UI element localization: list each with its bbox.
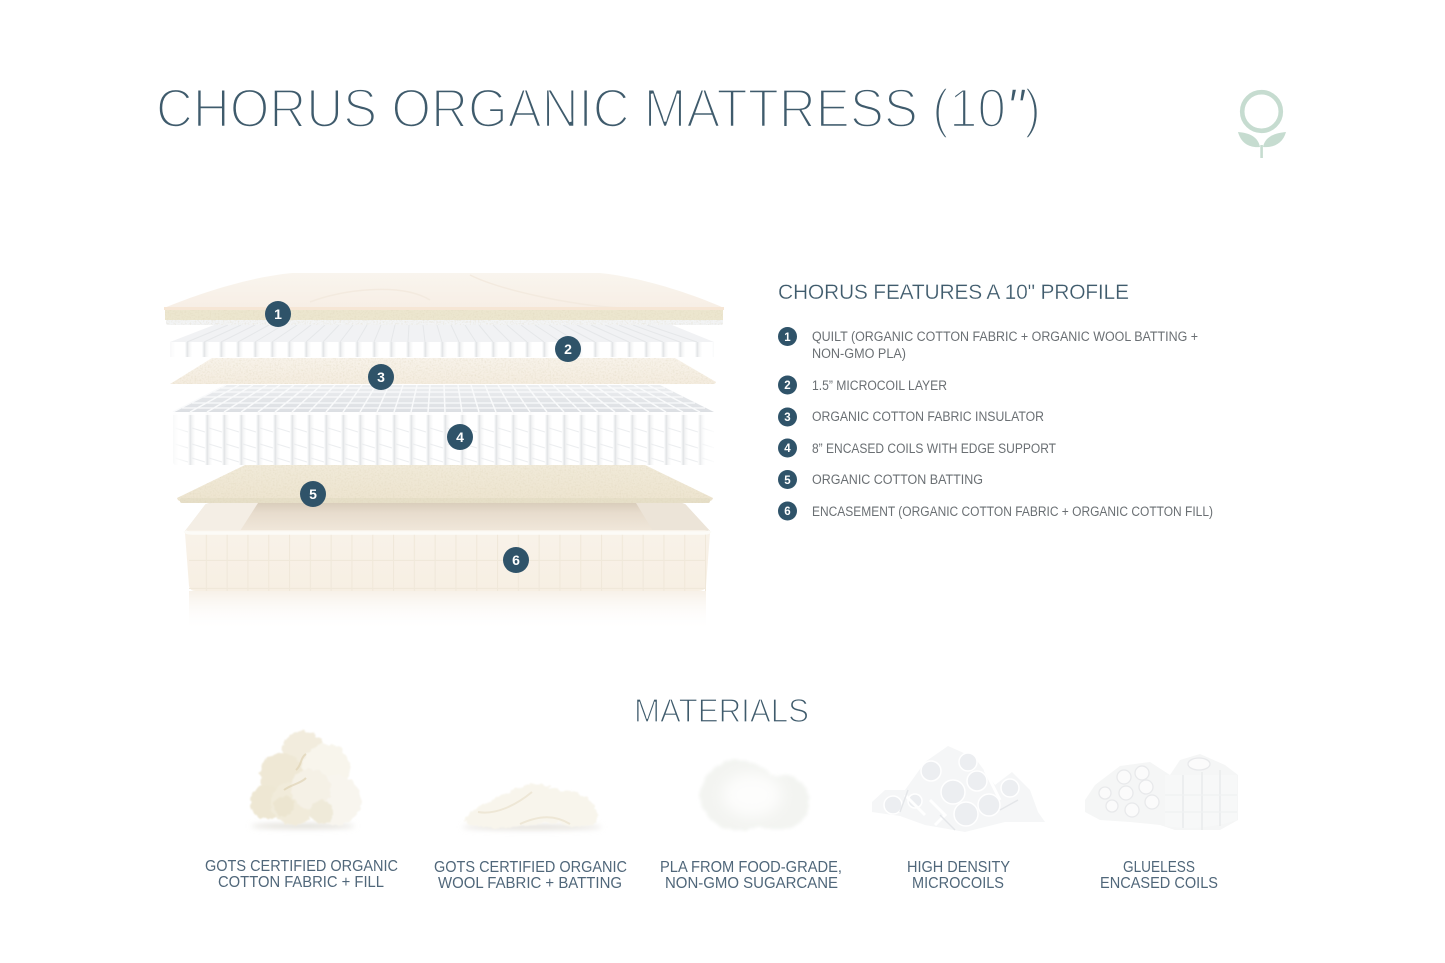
materials heading: MATERIALS: [634, 692, 809, 729]
item 4: 8” ENCASED COILS WITH EDGE SUPPORT: [812, 441, 1056, 456]
item 1: [778, 327, 1198, 361]
material: encased coils: [1085, 754, 1238, 892]
item 4: 4: [784, 443, 791, 455]
caption: [434, 859, 627, 892]
item 5: ORGANIC COTTON BATTING: [812, 472, 983, 487]
icon: wool batting: [462, 784, 602, 830]
caption: [660, 859, 842, 892]
layer 4: encased coils: [173, 385, 714, 465]
item 5: [778, 470, 983, 489]
item 1: QUILT (ORGANIC COTTON FABRIC + ORGANIC WOOL BATTING +: [812, 329, 1198, 344]
badge 5: [300, 481, 326, 507]
icon: encased coil bundle: [1085, 754, 1238, 830]
layer 3: organic cotton insulator: [170, 358, 716, 384]
material: organic cotton: [205, 731, 398, 891]
caption: GLUELESS: [1123, 859, 1195, 876]
item 6: [778, 502, 1213, 520]
material: microcoils: [872, 746, 1045, 892]
icon: cotton tuft: [250, 731, 361, 828]
item 6: 6: [784, 506, 791, 518]
layer 2: microcoil layer: [170, 325, 714, 357]
item 1: 1: [784, 332, 791, 344]
caption: [205, 858, 398, 891]
badge 1: [265, 301, 291, 327]
item 3: ORGANIC COTTON FABRIC INSULATOR: [812, 409, 1044, 424]
caption: COTTON FABRIC + FILL: [218, 874, 384, 891]
badge 3: 3: [377, 369, 385, 385]
item 6: ENCASEMENT (ORGANIC COTTON FABRIC + ORGANIC COTTON FILL): [812, 504, 1213, 519]
caption: GOTS CERTIFIED ORGANIC: [205, 858, 398, 875]
item 3: 3: [784, 412, 791, 424]
item 1: NON-GMO PLA): [812, 346, 906, 361]
title: CHORUS ORGANIC MATTRESS (10"): [156, 77, 1041, 139]
caption: [1100, 859, 1218, 892]
badge 1: 1: [274, 306, 282, 322]
badge 4: [447, 424, 473, 450]
item 2: 1.5” MICROCOIL LAYER: [812, 378, 947, 393]
layered mattress diagram: [164, 273, 724, 631]
badge 2: [555, 336, 581, 362]
icon: sprout logo: [1238, 92, 1286, 158]
item 2: 2: [784, 380, 791, 392]
features list: [778, 327, 1213, 520]
caption: WOOL FABRIC + BATTING: [438, 875, 622, 892]
badge 2: 2: [564, 341, 572, 357]
caption: GOTS CERTIFIED ORGANIC: [434, 859, 627, 876]
caption: NON-GMO SUGARCANE: [665, 875, 838, 892]
badge 3: [368, 364, 394, 390]
caption: HIGH DENSITY: [907, 859, 1010, 876]
material: organic wool: [434, 784, 627, 892]
item 5: 5: [784, 475, 791, 487]
badge 5: 5: [309, 486, 317, 502]
caption: PLA FROM FOOD-GRADE,: [660, 859, 842, 876]
item 2: [778, 376, 947, 394]
badge 6: [503, 547, 529, 573]
layer 6: encasement box: [185, 503, 710, 631]
features heading: CHORUS FEATURES A 10" PROFILE: [778, 281, 1129, 304]
caption: MICROCOILS: [912, 875, 1004, 892]
item 4: [778, 438, 1056, 458]
item 3: [778, 408, 1044, 426]
layer 5: organic cotton batting: [177, 465, 713, 503]
layer 1: quilt: [164, 273, 724, 325]
icon: microcoil pile: [872, 746, 1045, 832]
caption: [907, 859, 1010, 892]
badge 6: 6: [512, 552, 520, 568]
caption: ENCASED COILS: [1100, 875, 1218, 892]
badge 4: 4: [456, 429, 464, 445]
icon: PLA fluff: [700, 760, 809, 830]
material: PLA: [660, 760, 842, 892]
